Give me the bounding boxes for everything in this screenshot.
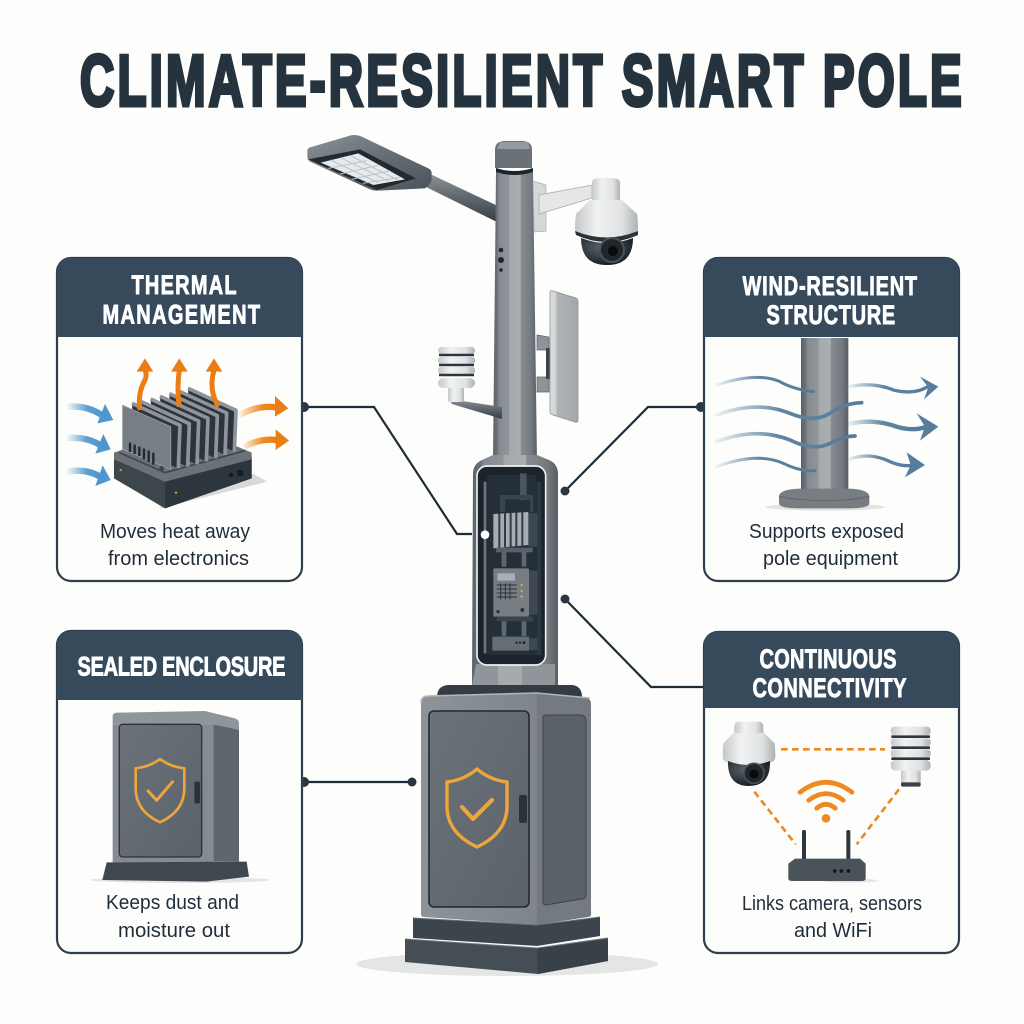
heading: CONTINUOUS: [760, 644, 896, 675]
cabinet door: [429, 711, 529, 907]
central smart pole illustration: [307, 135, 658, 976]
fins: [123, 388, 236, 469]
panel header: [57, 631, 302, 700]
connector lines: [299, 402, 706, 787]
camera mount: [533, 181, 592, 232]
enclosure collar: [437, 685, 582, 697]
blue airflow arrows: [66, 404, 113, 486]
cabinet side panel: [543, 715, 586, 905]
panel antenna: [537, 291, 578, 422]
panel header: [57, 258, 302, 337]
door handle: [519, 795, 527, 823]
upper pole shaft: [493, 172, 537, 462]
description: pole equipment: [763, 548, 898, 570]
lower pole housing: [472, 455, 558, 685]
ground shadow: [356, 952, 658, 976]
enclosure cabinet: [421, 693, 591, 925]
open equipment compartment: [477, 466, 546, 665]
heading: SEALED ENCLOSURE: [78, 652, 285, 682]
router: [788, 830, 878, 883]
panel: wind-resilient structure: [704, 258, 959, 581]
heading: [102, 270, 261, 330]
shield check icon: [447, 769, 507, 847]
icon: small cabinet with shield: [90, 711, 270, 883]
panel header: [704, 258, 959, 337]
weather sensor on bracket: [438, 347, 502, 419]
dome camera: [575, 178, 638, 265]
panel: thermal management: [57, 258, 302, 581]
base block: [114, 457, 252, 508]
heading: WIND-RESILIENT: [742, 271, 918, 302]
internal controller module: [493, 552, 538, 621]
pole cap: [495, 141, 533, 175]
wind streams: [717, 377, 927, 471]
internal power module: [492, 621, 537, 651]
description: Links camera, sensors: [742, 893, 922, 915]
description: Supports exposed: [749, 521, 904, 543]
description: moisture out: [118, 920, 230, 942]
description: Keeps dust and: [106, 892, 239, 914]
sensor: [891, 727, 931, 787]
description: and WiFi: [794, 920, 872, 942]
street lamp head: [307, 135, 432, 191]
heading: [742, 271, 918, 331]
pole footing: [779, 489, 869, 508]
heading: MANAGEMENT: [102, 300, 261, 330]
title: CLIMATE-RESILIENT SMART POLE: [80, 41, 962, 121]
heading: CONNECTIVITY: [752, 673, 907, 704]
description: [742, 893, 922, 942]
street lamp arm: [424, 173, 500, 223]
shield check: [136, 759, 184, 822]
wifi symbol: [800, 782, 852, 823]
camera: [723, 722, 775, 786]
heading: [752, 644, 907, 704]
description: [106, 892, 239, 942]
internal heat sink module: [493, 473, 538, 552]
description: from electronics: [108, 548, 249, 570]
icon: heat sink with airflow: [66, 358, 289, 508]
plinth base: [405, 917, 608, 974]
panel: continuous connectivity: [704, 632, 959, 953]
icon: pole in wind: [717, 338, 938, 511]
heading: STRUCTURE: [766, 300, 895, 331]
panel header: [704, 632, 959, 708]
white connector dot: [481, 530, 489, 539]
description: [749, 521, 904, 570]
heading: THERMAL: [132, 270, 237, 301]
icon: connected devices: [723, 722, 931, 883]
panel: sealed enclosure: [57, 631, 302, 953]
orange heat arrows: [137, 358, 289, 450]
description: [100, 521, 250, 570]
pole port holes: [498, 248, 504, 272]
dashed links: [754, 749, 899, 844]
description: Moves heat away: [100, 521, 250, 543]
